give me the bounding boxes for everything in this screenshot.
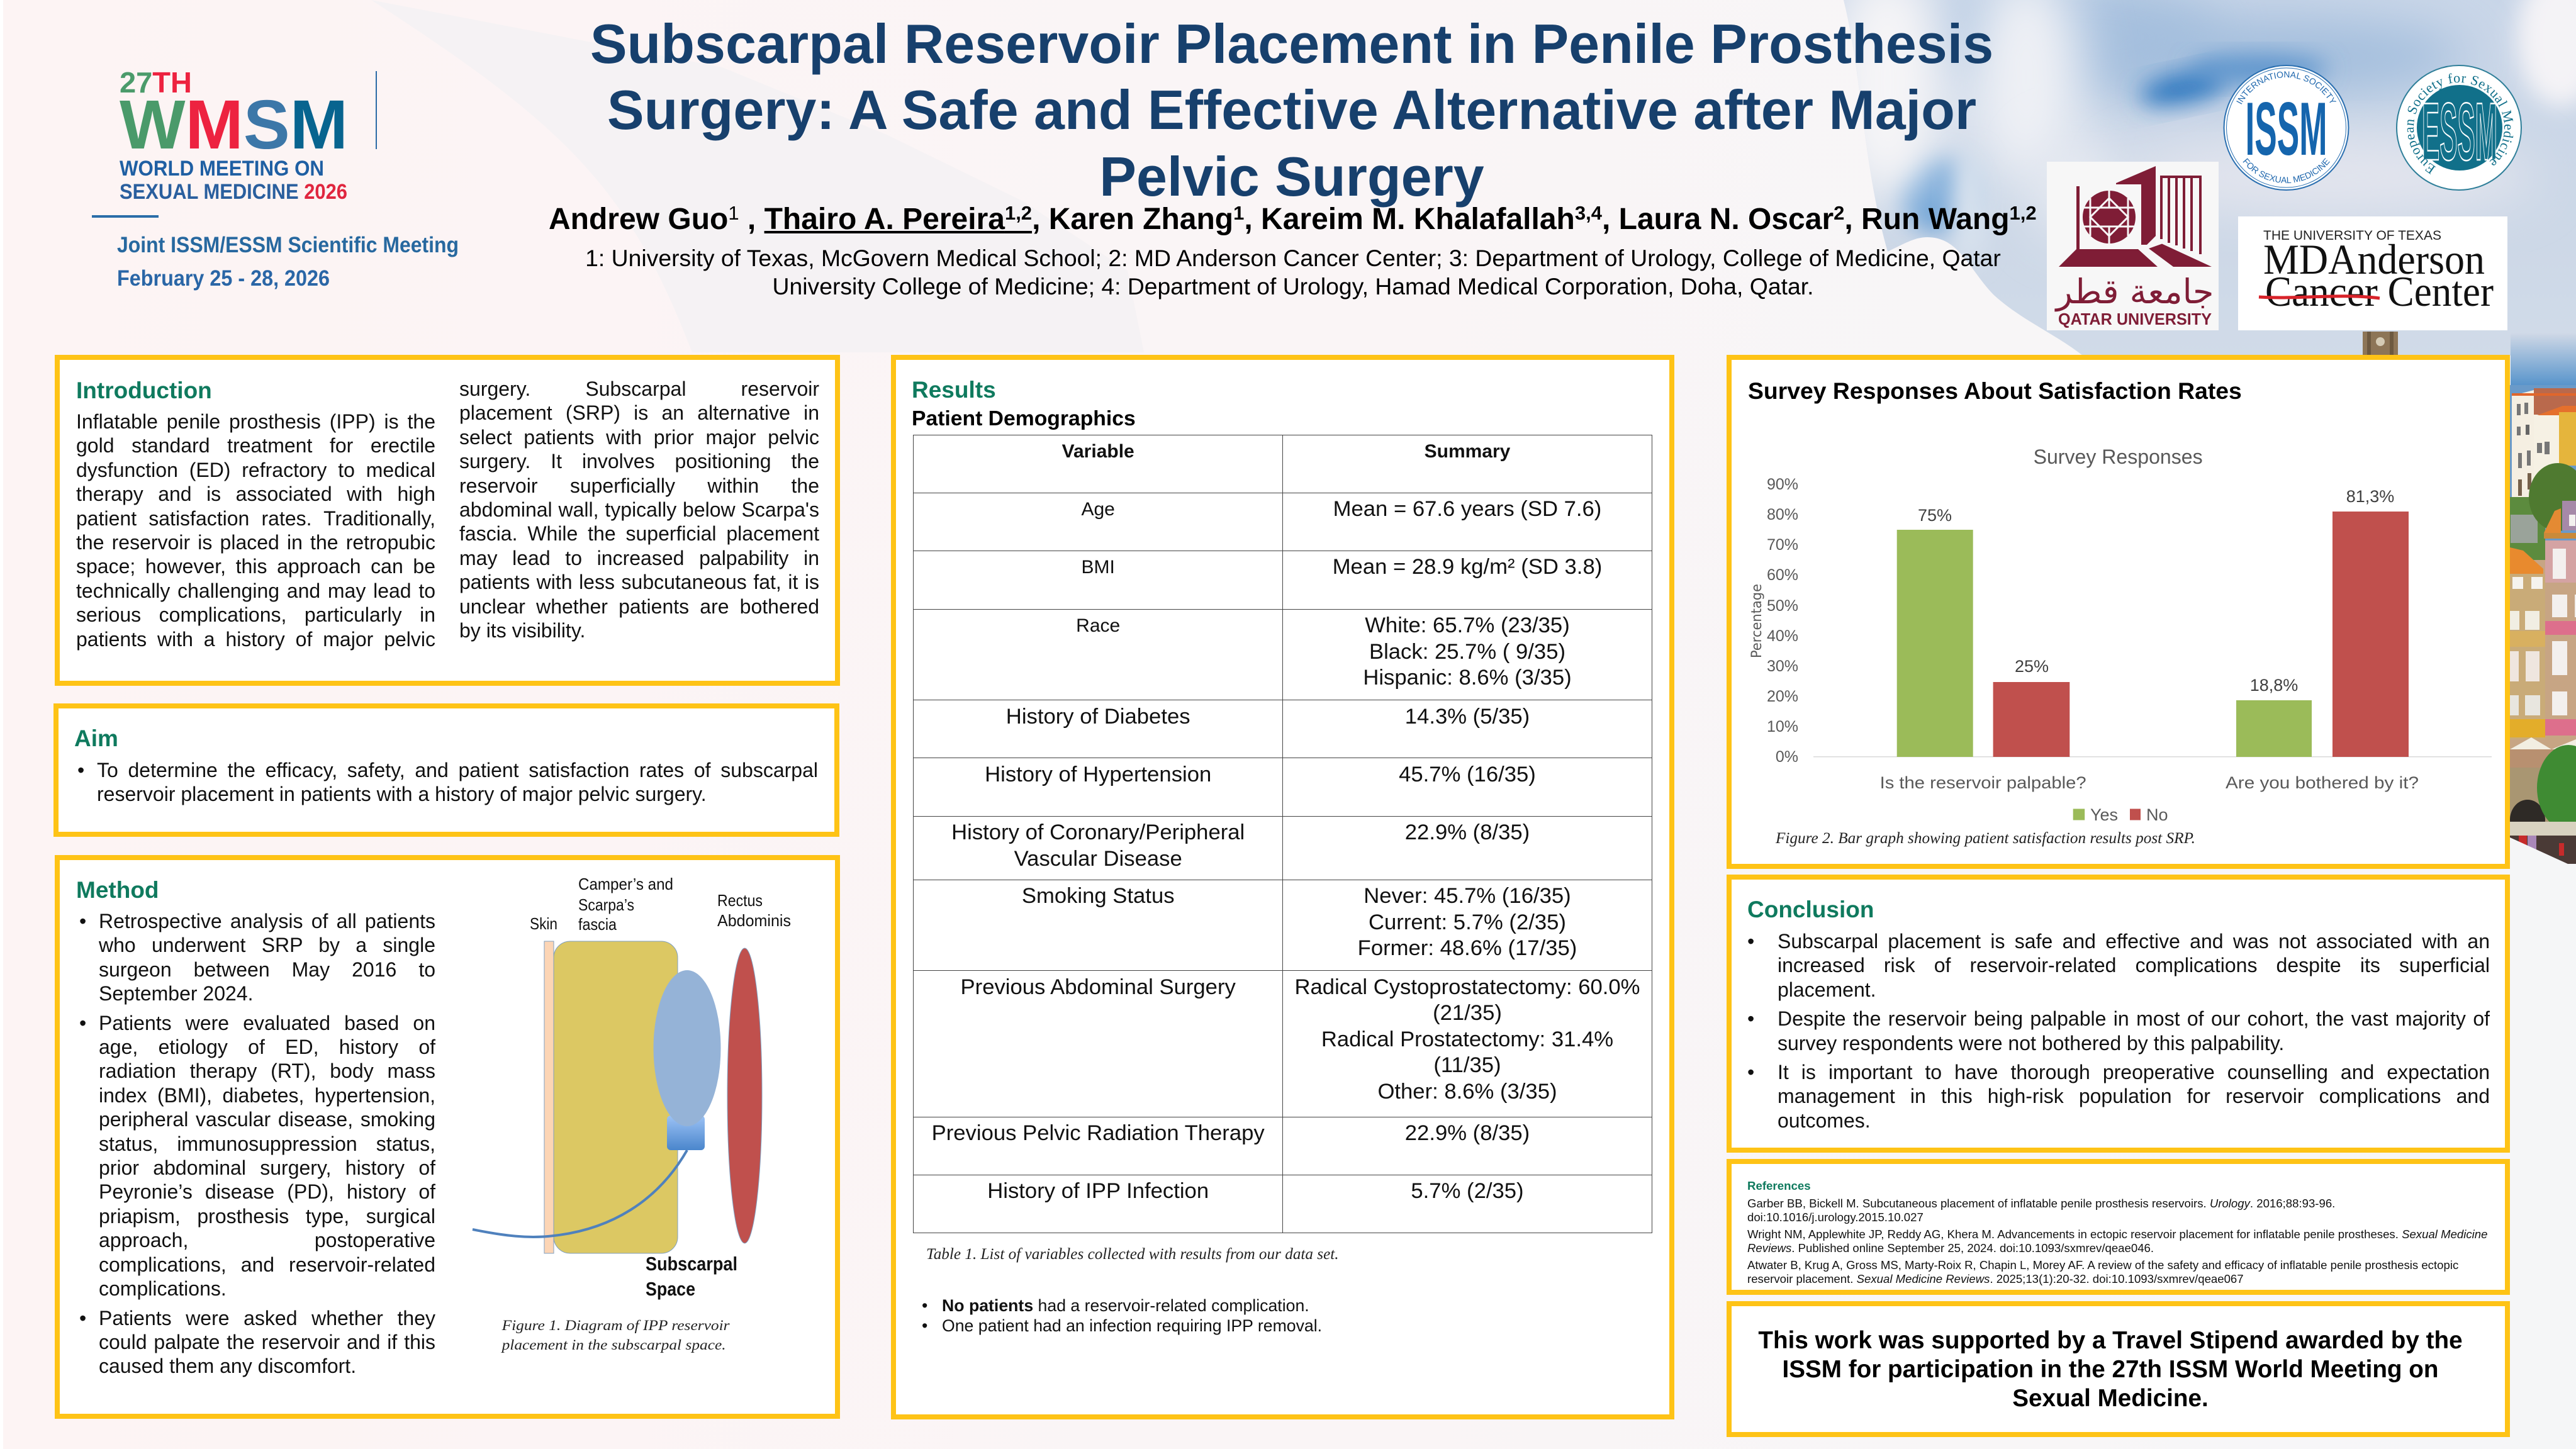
logo: ESSM: European Society for Sexual Medicine <box>2407 73 2513 175</box>
title: Surgery: A Safe and Effective Alternative after Major <box>607 79 1976 141</box>
text block: introduction column 2: patients with less subcutaneous fat, it is <box>459 571 819 593</box>
text block: introduction column 1: technically challenging and may lead to <box>76 579 435 602</box>
affiliations: University College of Medicine; 4: Department of Urology, Hamad Medical Corporation, Doha, Qatar. <box>773 273 1813 299</box>
panel: conclusion <box>1727 875 2510 1153</box>
row: Smoking Status <box>914 880 1652 971</box>
panel: survey responses <box>1727 355 2510 869</box>
y axis labels <box>1767 476 1798 766</box>
text block: aim bullet: • <box>77 759 84 781</box>
logo text: 27TH: 27TH <box>120 66 192 99</box>
text block: introduction column 1: patients with a history of major pelvic <box>76 628 435 651</box>
row: History of Hypertension <box>985 763 1536 786</box>
row: BMI: BMI <box>1082 557 1115 578</box>
caption: figure 1: placement in the subscarpal space. <box>500 1337 726 1353</box>
text block: introduction column 1: dysfunction (ED) refractory to medical <box>76 459 435 481</box>
panel: method <box>55 855 840 1419</box>
text block: reference list: Wright NM, Applewhite JP, Reddy AG, Khera M. Advancements in ectopic reservoir placement for inflatable penile prostheses. Sexual Medicine <box>1747 1228 2488 1241</box>
heading: Introduction: Introduction <box>76 378 212 403</box>
text block: reference list: Atwater B, Krug A, Gross MS, Marty-Roix R, Chapin L, Morey AF. A review of the safety and efficacy of inflatable penile prosthesis ectopic <box>1747 1258 2458 1272</box>
subheading: Patient Demographics: Patient Demographics <box>912 406 1136 430</box>
logo: Qatar University: QATAR UNIVERSITY <box>2058 310 2212 328</box>
text block: conclusion bullets: Despite the reservoir being palpable in most of our cohort, the vast majority of <box>1778 1007 2490 1030</box>
title: Pelvic Surgery <box>1099 145 1484 208</box>
text block: reference list: doi:10.1016/j.urology.2015.10.027 <box>1747 1211 1924 1224</box>
text block: method bullets: • <box>79 1306 86 1329</box>
row: History of Coronary/Peripheral Vascular Disease: 22.9% (8/35) <box>1405 820 1530 844</box>
diagram labels: Space <box>646 1278 695 1300</box>
row: History of IPP Infection <box>914 1175 1652 1233</box>
diagram labels: fascia <box>578 915 617 934</box>
category labels: Is the reservoir palpable? <box>1880 773 2086 792</box>
row: Previous Abdominal Surgery: Radical Prostatectomy: 31.4% <box>1321 1027 1613 1051</box>
text block: introduction column 2: surgery. It involves positioning the <box>459 450 819 473</box>
row: Race: White: 65.7% (23/35) <box>1365 613 1570 637</box>
logo: MD Anderson Cancer Center <box>2238 216 2507 330</box>
logo text: February 25 - 28, 2026: February 25 - 28, 2026 <box>117 266 330 291</box>
heading: References: References <box>1747 1179 1811 1192</box>
row: Smoking Status: Current: 5.7% (2/35) <box>1369 910 1566 934</box>
affiliations <box>585 245 2001 299</box>
row: History of Hypertension: 45.7% (16/35) <box>1399 763 1536 786</box>
text block: introduction column 2: surgery. Subscarpal reservoir <box>459 378 819 400</box>
y axis labels: 20% <box>1767 688 1798 705</box>
text block: travel stipend statement: Sexual Medicine. <box>2012 1385 2209 1412</box>
row: History of Diabetes: History of Diabetes <box>1006 705 1190 729</box>
bar chart: survey responses <box>1732 437 2505 864</box>
text block: introduction column 2: abdominal wall, typically below Scarpa's <box>459 498 819 521</box>
logo: ISSM: FOR SEXUAL MEDICINE <box>2243 158 2330 184</box>
y axis labels: 0% <box>1776 748 1798 766</box>
table header <box>932 441 1640 1203</box>
text block: method bullets: index (BMI), diabetes, hypertension, <box>99 1084 435 1107</box>
text block: reference list: Reviews. Published online September 25, 2024. doi:10.1093/sxmrev/qeae046. <box>1747 1241 2154 1255</box>
row: Race: Race <box>1076 615 1120 636</box>
caption: figure 1: Figure 1. Diagram of IPP reservoir <box>501 1318 731 1333</box>
data labels: 81,3% <box>2346 487 2394 506</box>
panel: introduction <box>55 355 840 686</box>
text block: reference list <box>1747 1197 2496 1286</box>
row: Previous Abdominal Surgery: Previous Abdominal Surgery <box>961 975 1236 999</box>
row: Age: Mean = 67.6 years (SD 7.6) <box>1333 497 1601 521</box>
diagram part: tubing <box>473 1150 687 1237</box>
row: Smoking Status: Smoking Status <box>1022 884 1175 908</box>
text block: method bullets <box>79 910 435 1377</box>
text block: method bullets: Patients were asked whether they <box>99 1306 435 1329</box>
text block: method bullets: radiation therapy (RT), body mass <box>99 1060 435 1082</box>
text block: method bullets: priapism, prosthesis type, surgical <box>99 1205 435 1228</box>
text block: introduction column 2: by its visibility. <box>459 619 585 642</box>
authors: Andrew Guo1 , Thairo A. Pereira1,2, Karen Zhang1, Kareim M. Khalafallah3,4, Laura N. Oscar2, Run Wang1,2 <box>549 202 2037 236</box>
row: History of IPP Infection: 5.7% (2/35) <box>1411 1179 1524 1203</box>
logo: Qatar University: جامعة قطر <box>2054 272 2214 311</box>
heading: Conclusion: Conclusion <box>1747 897 1874 922</box>
diagram labels <box>530 875 791 1300</box>
text block: method bullets: surgeon between May 2016 to <box>99 958 435 981</box>
logo text: Sexual Medicine 2026: SEXUAL MEDICINE 2026 <box>120 180 347 204</box>
legend: Yes <box>2090 805 2118 824</box>
photo: Porto riverside buildings <box>2510 333 2576 881</box>
row: Previous Abdominal Surgery: Radical Cystoprostatectomy: 60.0% <box>1295 975 1640 999</box>
text block: aim bullet: To determine the efficacy, safety, and patient satisfaction rates of subscarpal <box>97 759 818 781</box>
text block: reference list: reservoir placement. Sexual Medicine Reviews. 2025;13(1):20-32. doi:10.1093/sxmrev/qeae067 <box>1747 1272 2244 1285</box>
text block: aim bullet <box>77 759 818 805</box>
table header: Variable <box>1062 441 1134 462</box>
text block: method bullets: • <box>79 1012 86 1034</box>
text block: conclusion bullets: • <box>1747 1007 1754 1030</box>
row: Previous Abdominal Surgery: (11/35) <box>1433 1053 1501 1077</box>
row: Age <box>1081 497 1601 521</box>
diagram labels: Skin <box>530 914 557 933</box>
text block: conclusion bullets: • <box>1747 1061 1754 1083</box>
text block: aim bullet: reservoir placement in patients with a history of major pelvic surgery. <box>97 783 707 805</box>
text block: conclusion bullets: survey respondents were not bothered by this palpability. <box>1778 1032 2284 1055</box>
text block: introduction column 1: the reservoir is placed in the retropubic <box>76 531 435 554</box>
title: Subscarpal Reservoir Placement in Penile Prosthesis <box>590 13 1993 75</box>
title <box>590 13 1993 208</box>
text block: introduction column 2: unclear whether patients are bothered <box>459 595 819 618</box>
logo: MD Anderson Cancer Center: THE UNIVERSITY OF TEXAS <box>2263 228 2441 243</box>
diagram: IPP reservoir placement in subscarpal space <box>472 875 791 1353</box>
row: Previous Abdominal Surgery: Other: 8.6% (3/35) <box>1377 1080 1557 1104</box>
row: Previous Pelvic Radiation Therapy <box>914 1117 1652 1175</box>
bars: Is the reservoir palpable <box>1897 530 2069 757</box>
y axis labels: 90% <box>1767 476 1798 493</box>
text block: travel stipend statement: This work was supported by a Travel Stipend awarded by the <box>1758 1327 2463 1354</box>
y axis labels: 30% <box>1767 657 1798 675</box>
text block: conclusion bullets: placement. <box>1778 978 1876 1001</box>
row: BMI <box>1082 555 1602 579</box>
y axis labels: 10% <box>1767 718 1798 736</box>
row: History of Coronary/Peripheral Vascular Disease <box>914 816 1652 880</box>
diagram labels: Abdominis <box>717 911 791 930</box>
text block: introduction column 1: therapy and is associated with high <box>76 483 435 505</box>
diagram labels: Scarpa’s <box>578 895 634 914</box>
row: Previous Abdominal Surgery: (21/35) <box>1433 1001 1502 1025</box>
text block: introduction column 1 <box>76 410 435 651</box>
y axis labels: 60% <box>1767 566 1798 584</box>
logo: ISSM <box>2224 65 2349 191</box>
caption: figure 2: Figure 2. Bar graph showing patient satisfaction results post SRP. <box>1775 830 2195 847</box>
text block: conclusion bullets: Subscarpal placement is safe and effective and was not associated with an <box>1778 930 2490 953</box>
row: History of Hypertension: History of Hypertension <box>985 763 1211 786</box>
y axis title: Percentage <box>1749 584 1765 658</box>
text block: introduction column 1: gold standard treatment for erectile <box>76 434 435 457</box>
panel: results <box>891 355 1674 1419</box>
heading: Results: Results <box>912 377 996 403</box>
data labels: 18,8% <box>2250 676 2298 695</box>
panel: references <box>1727 1159 2510 1295</box>
text block: conclusion bullets: It is important to have thorough preoperative counselling and expectation <box>1778 1061 2490 1083</box>
row: Previous Pelvic Radiation Therapy: Previous Pelvic Radiation Therapy <box>932 1121 1265 1145</box>
diagram part: reservoir base <box>667 1116 705 1150</box>
table header: Summary <box>1425 441 1510 462</box>
diagram labels: Subscarpal <box>646 1253 737 1275</box>
text block: method bullets: complications, and reservoir-related <box>99 1253 435 1276</box>
text block: method bullets: Patients were evaluated based on <box>99 1012 435 1034</box>
diagram part: skin layer <box>544 941 554 1253</box>
text block: method bullets: Retrospective analysis of all patients <box>99 910 435 932</box>
text block: results bullets <box>922 1295 1322 1336</box>
logo: ISSM: INTERNATIONAL SOCIETY <box>2236 71 2337 104</box>
row: Smoking Status: Former: 48.6% (17/35) <box>1358 936 1577 960</box>
row: History of Coronary/Peripheral Vascular Disease: History of Coronary/Peripheral <box>951 820 1245 844</box>
text block: conclusion bullets <box>1747 929 2490 1133</box>
text block: method bullets: • <box>79 910 86 932</box>
data labels: 75% <box>1918 506 1952 525</box>
logo text: WMSM: WMSM <box>120 86 348 164</box>
text block: conclusion bullets: management in this high-risk population for reservoir complications and <box>1778 1085 2490 1107</box>
diagram part: fascia layer <box>554 941 678 1253</box>
text block: travel stipend statement <box>1727 1326 2494 1413</box>
heading: Aim: Aim <box>74 725 118 751</box>
text block: introduction column 1: space; however, this approach can be <box>76 555 435 578</box>
row: Previous Abdominal Surgery <box>914 971 1652 1117</box>
panel: aim <box>53 703 839 837</box>
text block: introduction column 2 <box>459 378 819 642</box>
text block: method bullets: age, etiology of ED, history of <box>99 1036 435 1058</box>
diagram part: rectus abdominis <box>727 948 762 1243</box>
logo text: World Meeting on: WORLD MEETING ON <box>120 157 324 181</box>
text block: results bullets: • <box>922 1296 927 1315</box>
text block: introduction column 2: may lead to increased palpability in <box>459 547 819 569</box>
affiliations: 1: University of Texas, McGovern Medical School; 2: MD Anderson Cancer Center; 3: Department of Urology, College of Medicine, Qatar <box>585 245 2001 271</box>
text block: method bullets: could palpate the reservoir and if this <box>99 1331 435 1353</box>
text block: method bullets: status, immunosuppression status, <box>99 1133 435 1155</box>
row: Race: Black: 25.7% ( 9/35) <box>1369 640 1565 664</box>
row: Race: Hispanic: 8.6% (3/35) <box>1363 666 1572 690</box>
text block: introduction column 2: reservoir superficially within the <box>459 474 819 497</box>
row: Race <box>1076 613 1572 690</box>
text block: results bullets: One patient had an infection requiring IPP removal. <box>942 1316 1322 1335</box>
caption: table 1: Table 1. List of variables collected with results from our data set. <box>926 1246 1339 1263</box>
text block: introduction column 1: Inflatable penile prosthesis (IPP) is the <box>76 410 435 433</box>
heading: Method: Method <box>76 877 159 903</box>
y axis labels: 40% <box>1767 627 1798 645</box>
icon: clock tower <box>2363 332 2398 355</box>
row: History of Diabetes: 14.3% (5/35) <box>1405 705 1530 729</box>
data labels: 25% <box>2015 657 2049 676</box>
diagram labels: Rectus <box>717 891 763 910</box>
table: patient demographics <box>913 435 1652 1233</box>
chart title: Survey Responses <box>2034 445 2203 468</box>
text block: method bullets: who underwent SRP by a single <box>99 934 435 956</box>
logo: MD Anderson Cancer Center: Cancer Center <box>2265 267 2494 315</box>
text block: introduction column 2: placement (SRP) is an alternative in <box>459 401 819 424</box>
text block: method bullets: Peyronie’s disease (PD), history of <box>99 1180 435 1203</box>
text block: conclusion bullets: outcomes. <box>1778 1109 1871 1132</box>
text block: conclusion bullets: • <box>1747 930 1754 953</box>
diagram labels: Camper’s and <box>578 875 673 893</box>
logo: MD Anderson Cancer Center: MDAnderson <box>2263 235 2485 283</box>
text block: results bullets: No patients had a reservoir-related complication. <box>942 1296 1309 1315</box>
logo: 27th WMSM World Meeting on Sexual Medicine 2026 <box>92 66 459 291</box>
text block: method bullets: prior abdominal surgery, history of <box>99 1156 435 1179</box>
y axis labels: 70% <box>1767 536 1798 554</box>
row: Previous Pelvic Radiation Therapy: 22.9% (8/35) <box>1405 1121 1530 1145</box>
text block: introduction column 2: fascia. While the superficial placement <box>459 522 819 545</box>
row: BMI: Mean = 28.9 kg/m² (SD 3.8) <box>1333 555 1602 579</box>
category labels <box>1880 773 2419 792</box>
category labels: Are you bothered by it? <box>2226 773 2419 792</box>
text block: conclusion bullets: increased risk of reservoir-related complications despite its superficial <box>1778 954 2490 976</box>
row: Age: Age <box>1081 499 1115 520</box>
data labels <box>1918 487 2394 695</box>
diagram part: reservoir <box>653 970 721 1126</box>
row: History of Coronary/Peripheral Vascular Disease: Vascular Disease <box>1014 847 1182 871</box>
y axis labels: 80% <box>1767 506 1798 523</box>
row: History of Diabetes <box>1006 705 1530 729</box>
heading: survey responses about satisfaction rates: Survey Responses About Satisfaction Rates <box>1748 378 2242 404</box>
row: History of IPP Infection: History of IPP Infection <box>987 1179 1209 1203</box>
y axis labels: 50% <box>1767 597 1798 615</box>
text block: introduction column 1: patient satisfaction rates. Traditionally, <box>76 507 435 530</box>
panel: funding acknowledgement <box>1727 1301 2510 1437</box>
text block: method bullets: approach, postoperative <box>99 1229 435 1251</box>
text block: travel stipend statement: ISSM for participation in the 27th ISSM World Meeting on <box>1782 1356 2439 1383</box>
text block: method bullets: peripheral vascular disease, smoking <box>99 1108 435 1131</box>
text block: method bullets: caused them any discomfort. <box>99 1355 356 1377</box>
row: Smoking Status: Never: 45.7% (16/35) <box>1364 884 1571 908</box>
caption: figure 1 <box>500 1318 731 1353</box>
text block: introduction column 2: select patients with prior major pelvic <box>459 426 819 449</box>
text block: reference list: Garber BB, Bickell M. Subcutaneous placement of inflatable penile prosthesis reservoirs. Urology. 2016;88:93-96. <box>1747 1197 2335 1210</box>
legend <box>2073 805 2168 824</box>
logo: Qatar University <box>2047 162 2219 330</box>
text block: results bullets: • <box>922 1316 927 1335</box>
text block: method bullets: September 2024. <box>99 982 253 1005</box>
text block: introduction column 1: serious complications, particularly in <box>76 603 435 626</box>
legend: No <box>2146 805 2168 824</box>
bars: Are you bothered by it <box>2236 512 2409 757</box>
text block: method bullets: complications. <box>99 1277 227 1300</box>
